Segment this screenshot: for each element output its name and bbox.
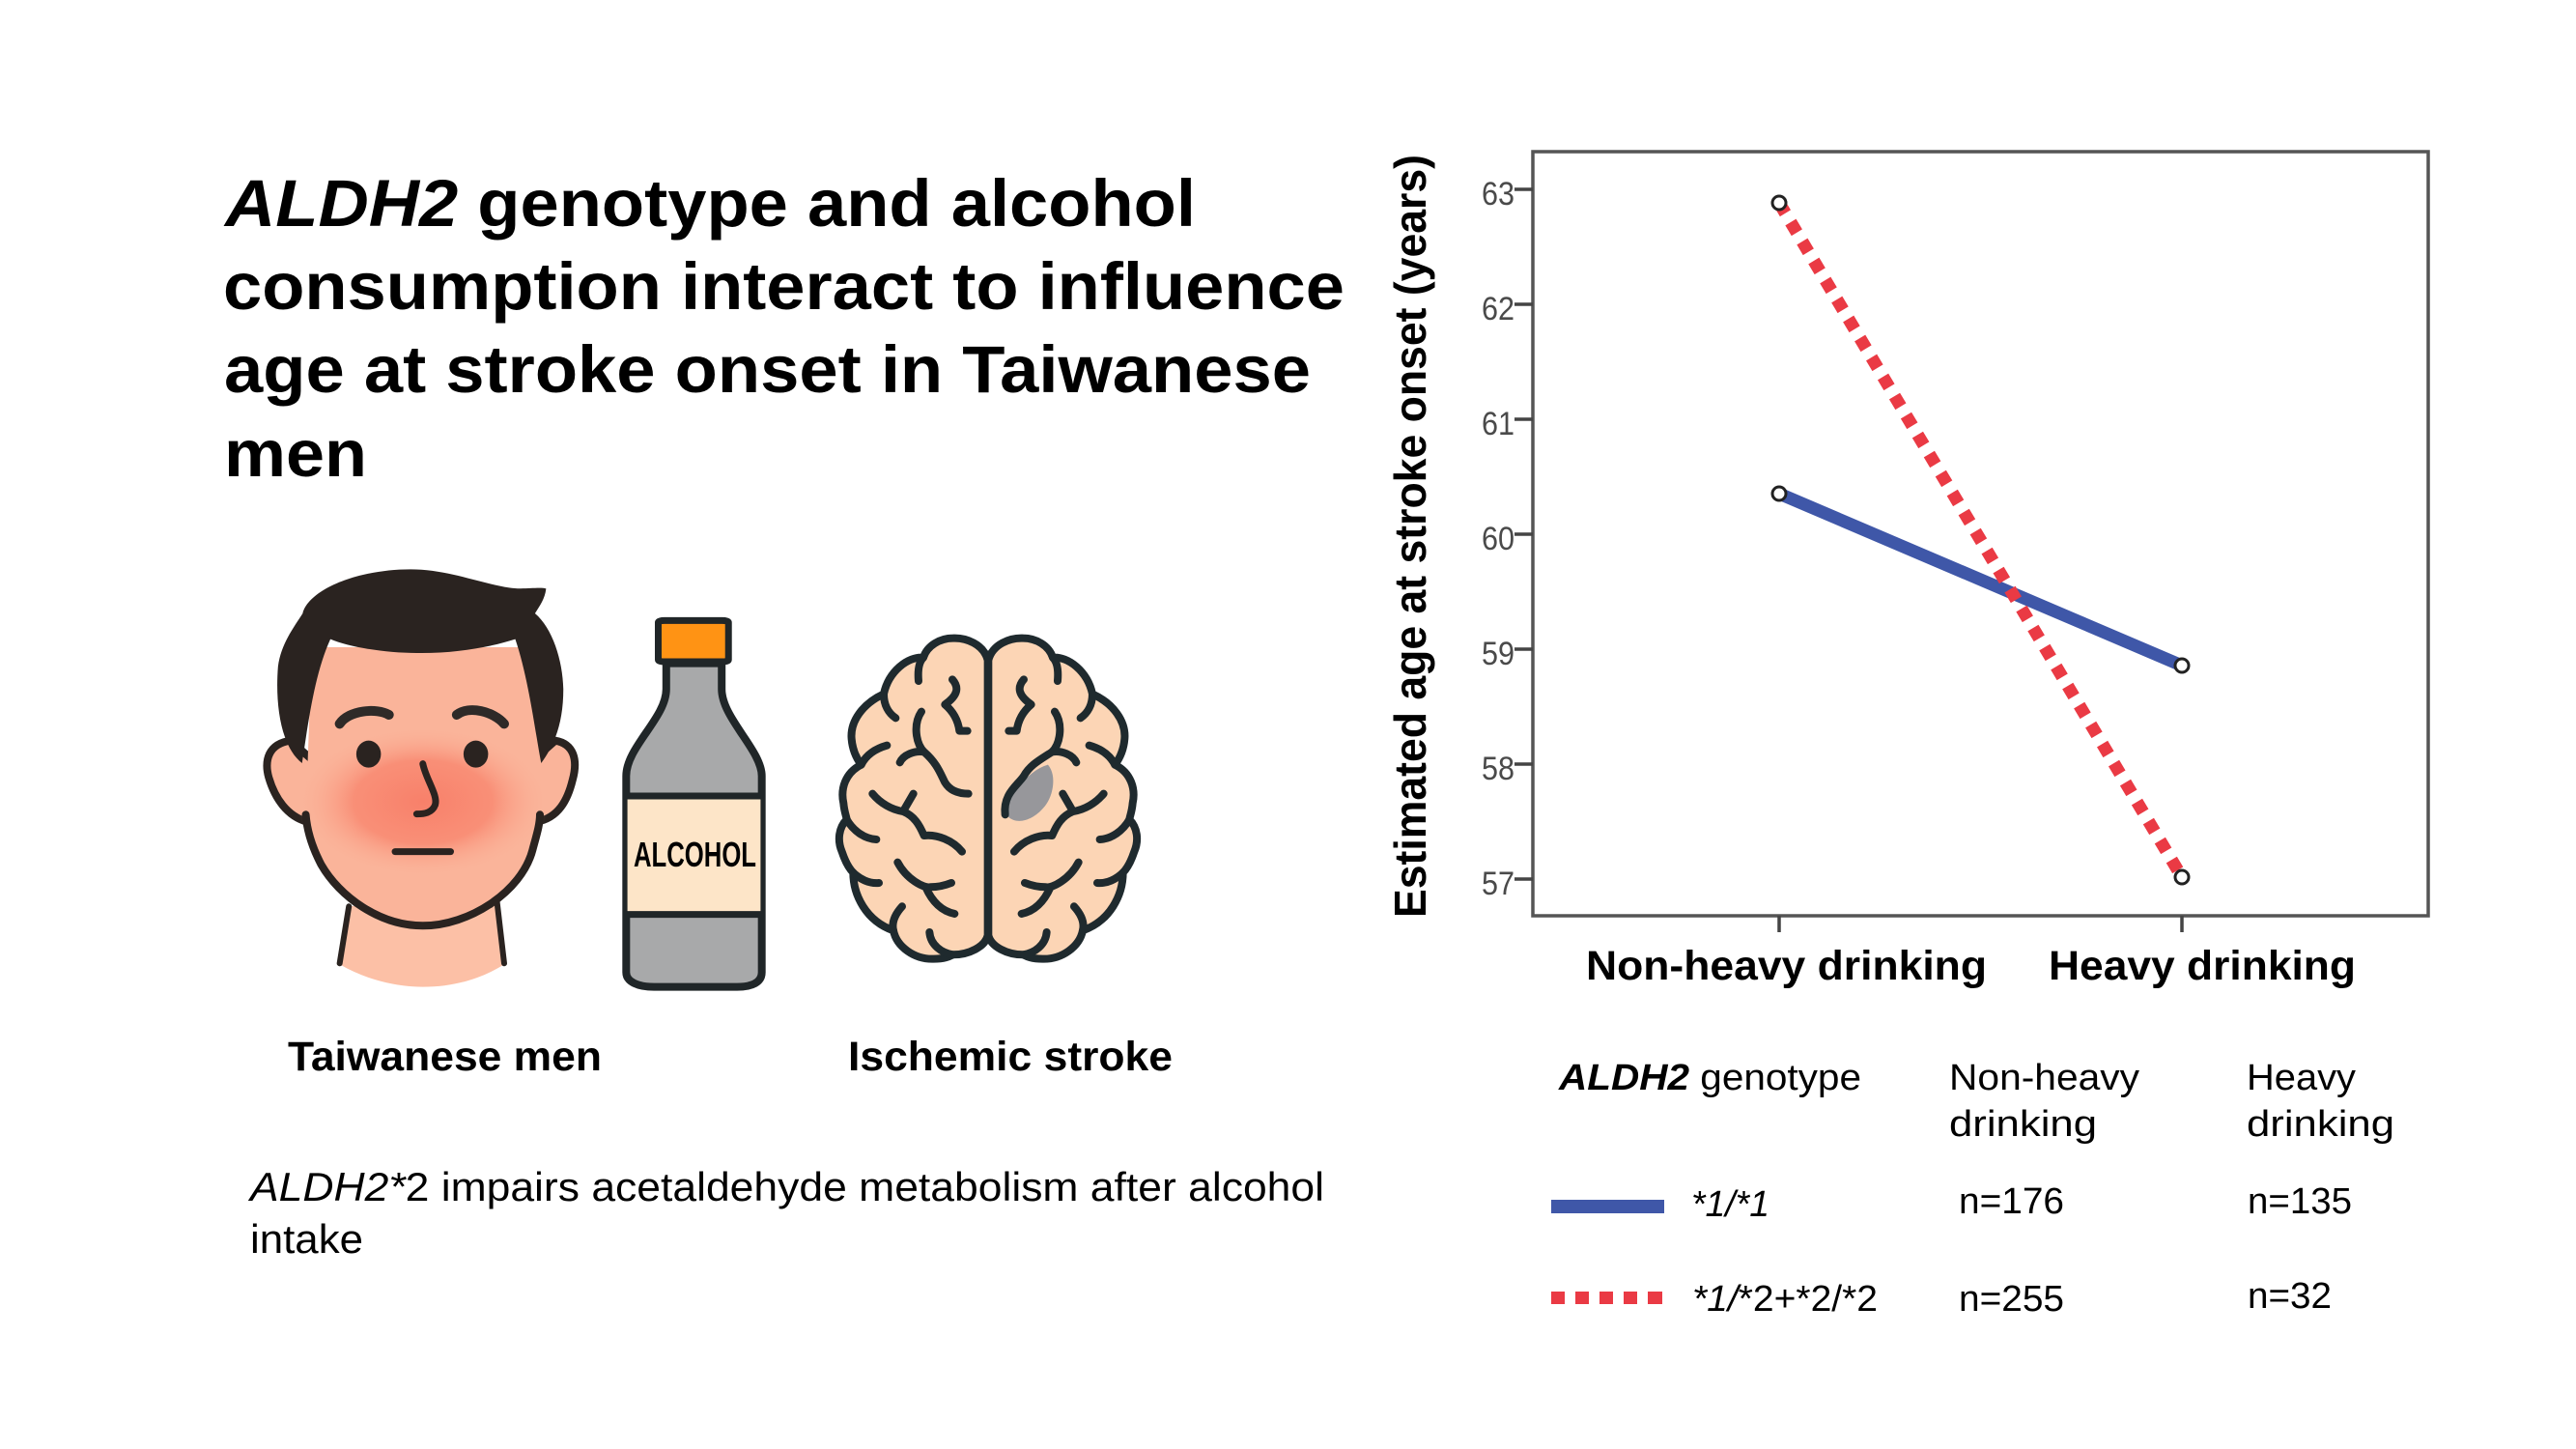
y tick labels: 63 xyxy=(1482,176,1514,213)
text: mechanism note: ALDH2*2 impairs acetaldehyde metabolism after alcohol xyxy=(247,1164,1324,1209)
hair xyxy=(277,569,563,763)
face xyxy=(306,647,543,925)
legend table: drinking xyxy=(1949,1104,2097,1145)
title: ALDH2 genotype and alcohol xyxy=(223,166,1196,241)
y tick labels: 57 xyxy=(1482,866,1514,902)
label: Ischemic stroke: Ischemic stroke xyxy=(848,1034,1173,1080)
legend key: red dashed xyxy=(1551,1292,1662,1304)
x-axis category labels: Non-heavy drinking xyxy=(1586,943,1987,989)
column header: heavy: Heavy xyxy=(2247,1058,2356,1098)
legend table: drinking xyxy=(2247,1104,2394,1145)
neck xyxy=(340,900,504,987)
title: consumption interact to influence xyxy=(223,249,1345,324)
ears xyxy=(267,741,575,822)
icon: brain with ischemic lesion xyxy=(839,639,1137,959)
legend key: blue xyxy=(1551,1200,1664,1213)
x-axis category labels xyxy=(1586,943,2356,989)
genotype *1/*2+*2/*2: *1/*2+*2/*2 xyxy=(1692,1279,1878,1320)
legend table: n=255 xyxy=(1959,1279,2064,1320)
nose xyxy=(416,764,436,814)
column header: non-heavy: Non-heavy xyxy=(1949,1058,2139,1098)
red dashed line xyxy=(1779,203,2182,877)
y tick labels: 58 xyxy=(1482,751,1514,787)
blue line *1/*1 xyxy=(1779,494,2182,666)
icon: alcohol bottle: ALCOHOL xyxy=(634,835,756,874)
y tick labels: 61 xyxy=(1482,406,1514,442)
legend table: n=135 xyxy=(2248,1181,2352,1222)
text: mechanism note xyxy=(247,1164,1324,1262)
title: age at stroke onset in Taiwanese xyxy=(224,332,1311,407)
y tick labels: 60 xyxy=(1482,521,1514,557)
title: men xyxy=(224,416,367,491)
genotype *1/*1: *1/*1 xyxy=(1691,1184,1769,1225)
icon: alcohol bottle xyxy=(626,620,762,987)
eyebrows xyxy=(340,710,504,724)
y tick labels xyxy=(1482,176,1514,902)
y ticks xyxy=(1514,189,2182,932)
legend header: ALDH2 genotype xyxy=(1558,1058,1861,1098)
eyes xyxy=(356,741,381,768)
lesion xyxy=(1005,765,1053,821)
text: mechanism note: intake xyxy=(250,1216,363,1262)
line chart xyxy=(1482,152,2428,932)
legend table: n=32 xyxy=(2248,1276,2332,1317)
plot frame xyxy=(1533,152,2428,916)
icon: flushed man's face xyxy=(267,569,575,987)
legend table xyxy=(1551,1058,2394,1320)
title xyxy=(223,166,1345,491)
y tick labels: 59 xyxy=(1482,636,1514,672)
mouth xyxy=(395,848,450,855)
x-axis category labels: Heavy drinking xyxy=(2049,943,2356,989)
legend table: n=176 xyxy=(1959,1181,2064,1222)
label: Taiwanese men: Taiwanese men xyxy=(288,1034,602,1080)
markers xyxy=(1772,196,2189,884)
y-axis title: Estimated age at stroke onset (years) xyxy=(1385,155,1435,918)
y tick labels: 62 xyxy=(1482,291,1514,327)
